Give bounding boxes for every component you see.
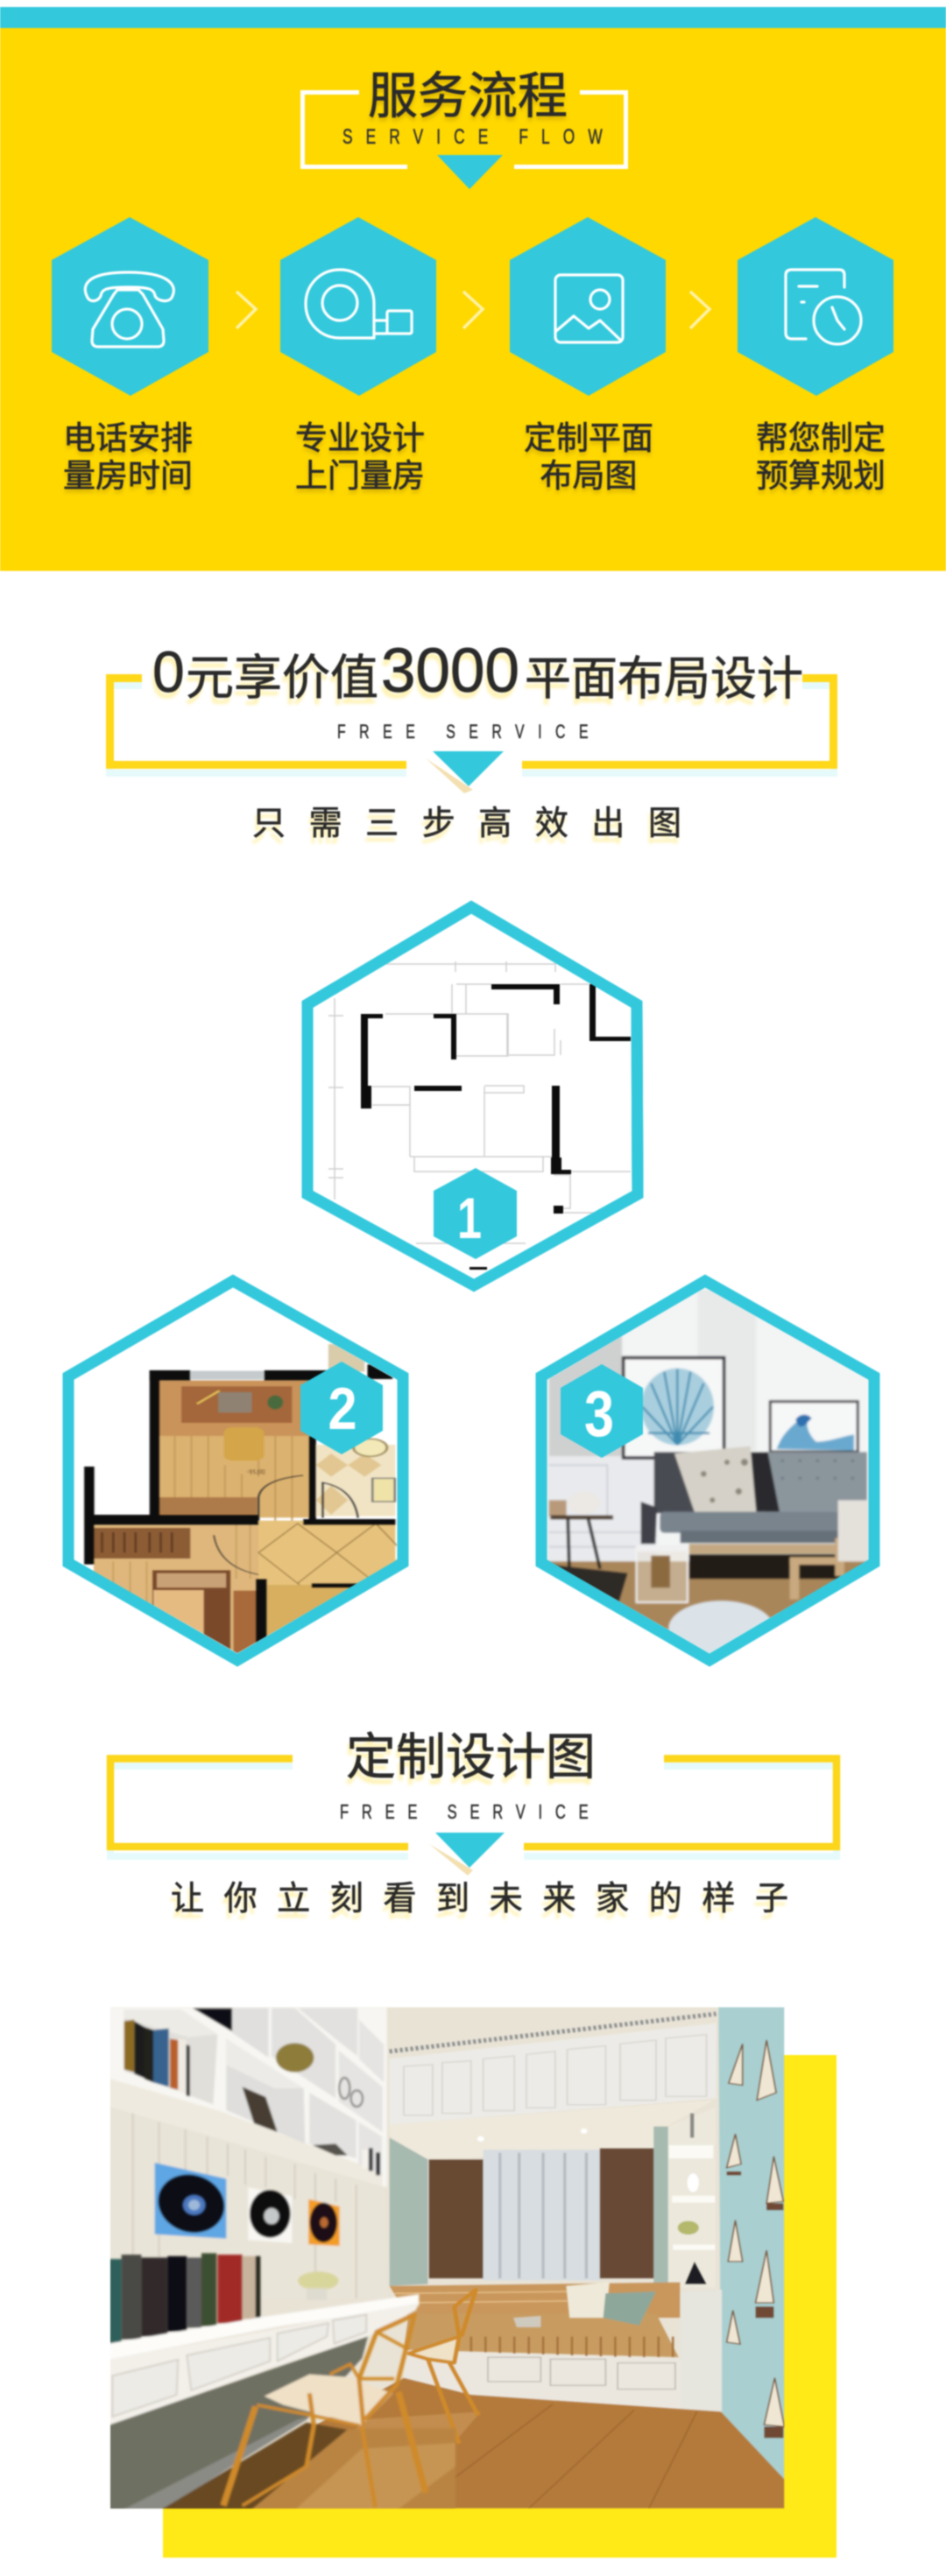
hexagon 3: living room	[534, 1270, 885, 1664]
floor plan drawing: 书房	[246, 1467, 266, 1475]
step 2: measure	[280, 217, 436, 496]
step 2: measure: 上门量房	[295, 449, 425, 496]
cabinets	[390, 2014, 717, 2124]
icon: picture	[555, 275, 623, 342]
niche shelves	[668, 2108, 715, 2288]
badge 1: 1	[457, 1186, 482, 1250]
top teal bar	[0, 7, 946, 28]
wall and shelving	[108, 2007, 387, 2300]
floor plan drawing	[84, 1344, 404, 1668]
heading: free plan design: 0	[152, 639, 185, 704]
heading: free plan design: FREE SERVICE	[337, 722, 589, 743]
arrow	[236, 292, 256, 328]
step 1: phone	[52, 217, 208, 496]
step 3: plan: 布局图	[540, 449, 638, 496]
photo: study room	[108, 2007, 784, 2510]
badge 2: 2	[328, 1376, 357, 1442]
heading: free plan design: 3000	[381, 637, 519, 706]
heading: service flow: SERVICE FLOW	[342, 125, 603, 149]
panel: service flow	[0, 28, 946, 571]
heading: free plan design	[109, 637, 834, 793]
step 4: budget	[738, 217, 893, 496]
heading: custom design: FREE SERVICE	[340, 1801, 589, 1824]
step 4: budget: 预算规划	[756, 449, 886, 496]
step 1: phone: 电话安排	[63, 412, 193, 459]
badge 2	[300, 1362, 383, 1454]
icon: document and clock	[786, 270, 861, 344]
desk and books	[108, 2253, 455, 2510]
right wallpaper wall	[718, 2007, 784, 2479]
heading: service flow	[303, 56, 625, 189]
arrow	[690, 292, 710, 328]
step 2: measure: 专业设计	[295, 412, 425, 459]
living room photo	[547, 1291, 869, 1653]
hexagon 2: coloured floor plan	[68, 1281, 404, 1668]
badge 3: 3	[584, 1377, 614, 1450]
hexagon 1: floor plan	[307, 907, 638, 1285]
yellow backing block	[163, 2055, 837, 2558]
subtitle: three steps: 只需三步高效出图	[252, 796, 681, 844]
heading: custom design: 定制设计图	[346, 1717, 596, 1789]
step 3: plan: 定制平面	[524, 412, 653, 459]
heading: service flow: 服务流程	[368, 56, 568, 128]
icon: telephone	[85, 272, 173, 347]
window seat	[390, 2282, 722, 2413]
arrow	[463, 292, 483, 328]
floor plan lines	[328, 961, 631, 1270]
subtitle: see your future home: 让你立刻看到未来家的样子	[171, 1871, 788, 1919]
badge 1	[434, 1168, 517, 1259]
badge 3	[561, 1364, 643, 1458]
heading: free plan design: 元享价值	[186, 638, 378, 708]
step 4: budget: 帮您制定	[756, 412, 886, 459]
heading: custom design	[110, 1717, 837, 1876]
ceiling	[110, 2007, 784, 2509]
heading: free plan design: 平面布局设计	[525, 642, 803, 708]
wood floor	[315, 2376, 785, 2509]
back chair	[409, 2290, 478, 2444]
step 3: plan	[510, 217, 666, 496]
step 1: phone: 量房时间	[63, 449, 193, 496]
icon: tape measure	[306, 270, 412, 338]
